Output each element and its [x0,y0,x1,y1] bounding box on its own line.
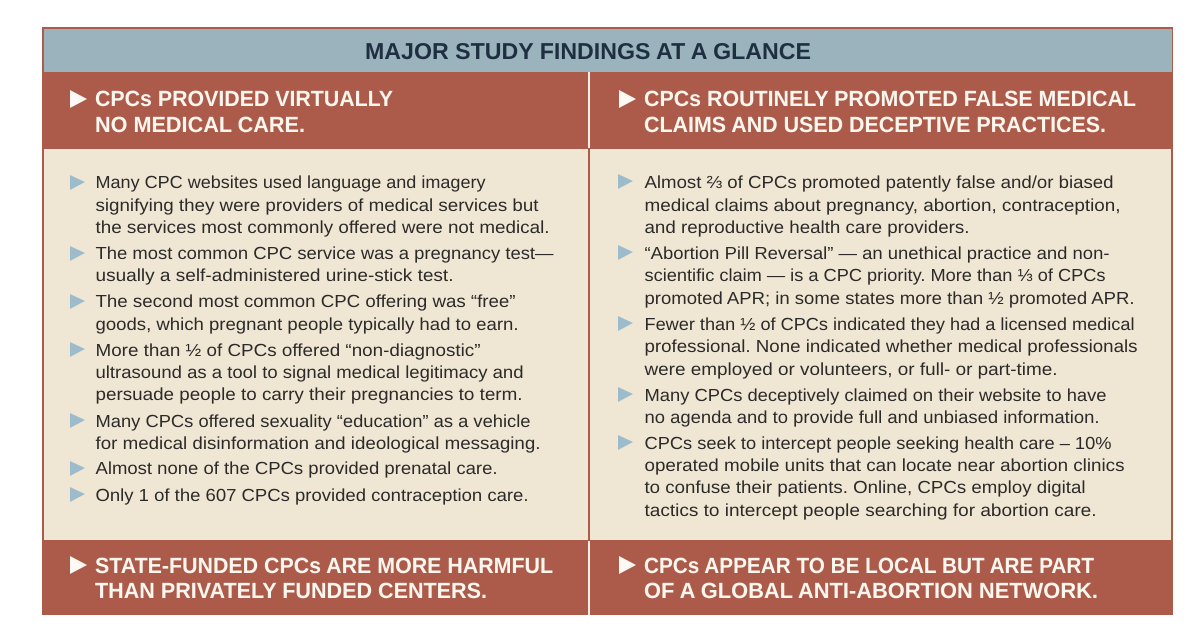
finding: contraception care: Only 1 of the 607 CPCs provided contraception care. [96,485,528,505]
finding: false claims [618,172,1120,237]
panel: false claims heading: CLAIMS AND USED DECEPTIVE PRACTICES. [644,112,1106,137]
finding: free goods [70,291,518,334]
panel: no medical care heading [42,72,588,148]
finding: intercept people: to confuse their patients. Online, CPCs employ digital [644,477,1086,497]
finding: website language [70,172,550,237]
panel: no medical care heading: CPCs PROVIDED VIRTUALLY [95,86,393,111]
panel: global network heading: CPCs APPEAR TO BE LOCAL BUT ARE PART [644,553,1095,578]
finding: ultrasound: persuade people to carry their pregnancies to term. [96,384,522,404]
finding: ultrasound: ultrasound as a tool to signal medical legitimacy and [96,362,524,382]
finding: licensed professionals: Fewer than ½ of CPCs indicated they had a licensed medical [644,314,1134,334]
finding: false claims: Almost ⅔ of CPCs promoted patently false and/or biased [644,172,1114,192]
panel: global network heading [590,541,1173,615]
title banner: MAJOR STUDY FINDINGS AT A GLANCE [365,38,811,64]
finding: intercept people: CPCs seek to intercept people seeking health care – 10% [644,433,1112,453]
finding: intercept people: operated mobile units that can locate near abortion clinics [644,455,1125,475]
finding: prenatal care: Almost none of the CPCs provided prenatal care. [96,458,498,478]
panel: state-funded heading [42,541,588,615]
finding: free goods: goods, which pregnant people typically had to earn. [96,314,518,334]
panel: state-funded heading: THAN PRIVATELY FUNDED CENTERS. [95,578,487,603]
finding: website language: the services most commonly offered were not medical. [96,217,550,237]
finding: false claims: medical claims about pregnancy, abortion, contraception, [644,195,1120,215]
finding: sexuality education [70,411,540,453]
finding: website language: signifying they were providers of medical services but [96,195,539,215]
finding: website language: Many CPC websites used language and imagery [96,172,486,192]
title banner [44,29,1172,72]
finding: no agenda claims [618,385,1106,427]
panel: false claims heading [590,72,1173,148]
finding: sexuality education: Many CPCs offered sexuality “education” as a vehicle [96,411,530,431]
finding: abortion pill reversal: scientific claim — is a CPC priority. More than ⅓ of CPCs [644,265,1106,285]
panel: medical care findings [44,149,588,540]
finding: false claims: and reproductive health care providers. [644,217,970,237]
panel: global network heading: OF A GLOBAL ANTI-ABORTION NETWORK. [644,578,1098,603]
finding: abortion pill reversal: “Abortion Pill Reversal” — an unethical practice and non- [644,243,1110,263]
panel: false claims heading: CPCs ROUTINELY PROMOTED FALSE MEDICAL [644,86,1136,111]
bottom divider line [588,541,590,615]
finding: intercept people: tactics to intercept people searching for abortion care. [644,500,1096,520]
finding: licensed professionals [618,314,1138,379]
finding: licensed professionals: professional. None indicated whether medical professionals [644,336,1138,356]
finding: licensed professionals: were employed or volunteers, or full- or part-time. [643,359,1058,379]
panel: state-funded heading: STATE-FUNDED CPCs ARE MORE HARMFUL [95,553,553,578]
finding: pregnancy test: The most common CPC service was a pregnancy test— [96,243,554,263]
finding: sexuality education: for medical disinformation and ideological messaging. [96,433,540,453]
finding: ultrasound: More than ½ of CPCs offered “non-diagnostic” [96,340,481,360]
panel: no medical care heading: NO MEDICAL CARE. [95,112,305,137]
finding: intercept people [618,433,1125,520]
finding: abortion pill reversal: promoted APR; in some states more than ½ promoted APR. [644,288,1134,308]
finding: no agenda claims: Many CPCs deceptively claimed on their website to have [644,385,1106,405]
finding: pregnancy test: usually a self-administered urine-stick test. [96,265,454,285]
divider line [588,72,590,148]
finding: no agenda claims: no agenda and to provide full and unbiased information. [644,407,1100,427]
panel: false claims findings [590,149,1171,540]
finding: abortion pill reversal [618,243,1134,308]
finding: pregnancy test [70,243,554,285]
finding: ultrasound [70,340,524,404]
finding: free goods: The second most common CPC offering was “free” [96,291,516,311]
